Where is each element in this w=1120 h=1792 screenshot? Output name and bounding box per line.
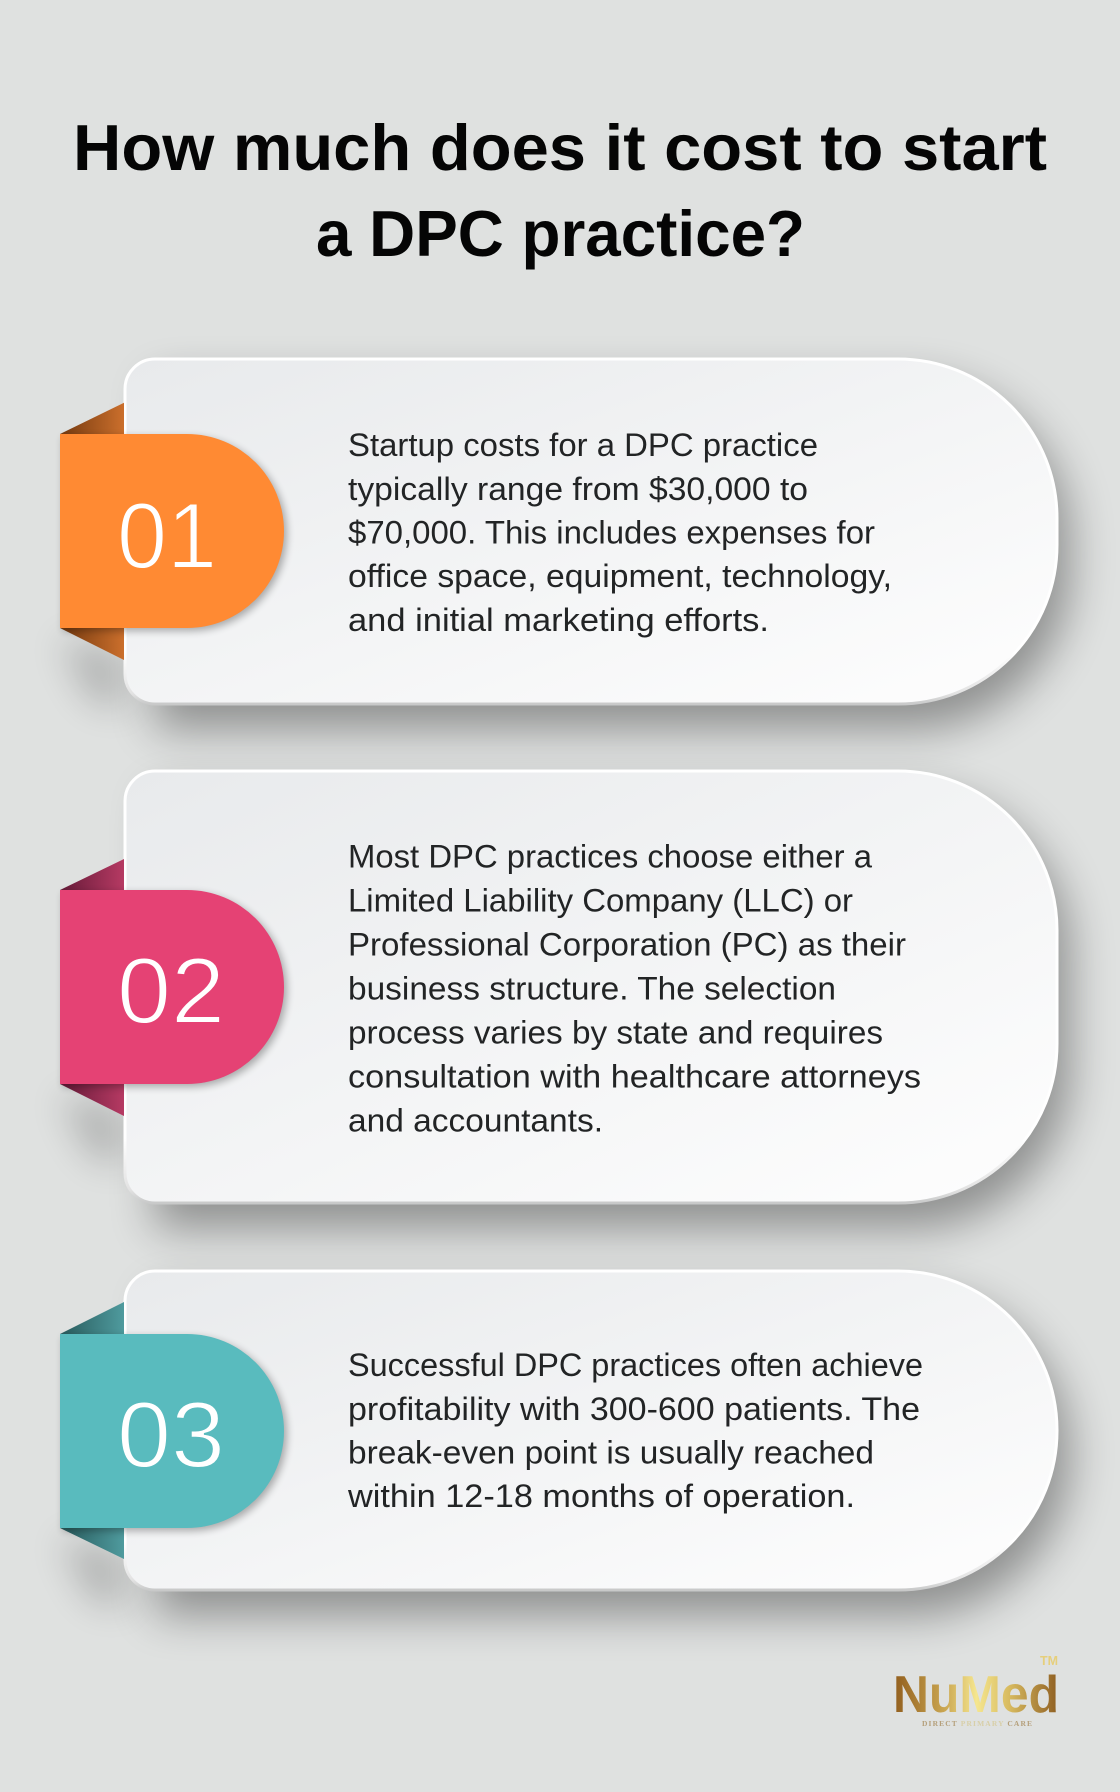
panel: step 03 profitability <box>60 1271 1070 1615</box>
number badge 01 <box>60 434 284 628</box>
text block 01: Startup costs for a DPC practice <box>348 427 818 463</box>
text block 02: Limited Liability Company (LLC) or <box>348 882 853 918</box>
text block 01: $70,000. This includes expenses for <box>348 514 875 550</box>
text block 02: consultation with healthcare attorneys <box>348 1058 921 1094</box>
text block 01: typically range from $30,000 to <box>348 471 808 507</box>
number badge 01: 01 <box>117 483 217 588</box>
text block 02: business structure. The selection <box>348 970 836 1006</box>
number badge 02 <box>60 890 284 1084</box>
text block 03: Successful DPC practices often achieve <box>348 1347 923 1383</box>
text block 03: break-even point is usually reached <box>348 1434 874 1470</box>
panel: step 01 startup costs <box>60 359 1070 729</box>
logo: NuMed: NuMed <box>893 1666 1059 1724</box>
text block 01 <box>348 427 892 638</box>
title <box>73 111 1047 270</box>
text block 02: and accountants. <box>348 1102 603 1138</box>
text block 02: Most DPC practices choose either a <box>348 838 872 874</box>
panel: step 02 business structure <box>60 771 1070 1228</box>
text block 03: within 12-18 months of operation. <box>347 1478 855 1514</box>
number badge 02: 02 <box>117 938 225 1043</box>
logo: NuMed: TM <box>1040 1654 1058 1668</box>
text block 01: office space, equipment, technology, <box>348 558 892 594</box>
text block 02: Professional Corporation (PC) as their <box>348 926 906 962</box>
text block 03: profitability with 300-600 patients. The <box>348 1391 920 1427</box>
number badge 03 <box>60 1334 284 1528</box>
logo: NuMed: DIRECT PRIMARY CARE <box>922 1719 1032 1728</box>
title: a DPC practice? <box>316 197 805 270</box>
text block 02: process varies by state and requires <box>348 1014 883 1050</box>
text block 02 <box>348 838 921 1138</box>
text block 01: and initial marketing efforts. <box>348 602 769 638</box>
title: How much does it cost to start <box>73 111 1047 184</box>
text block 03 <box>347 1347 923 1514</box>
number badge 03: 03 <box>117 1382 225 1487</box>
